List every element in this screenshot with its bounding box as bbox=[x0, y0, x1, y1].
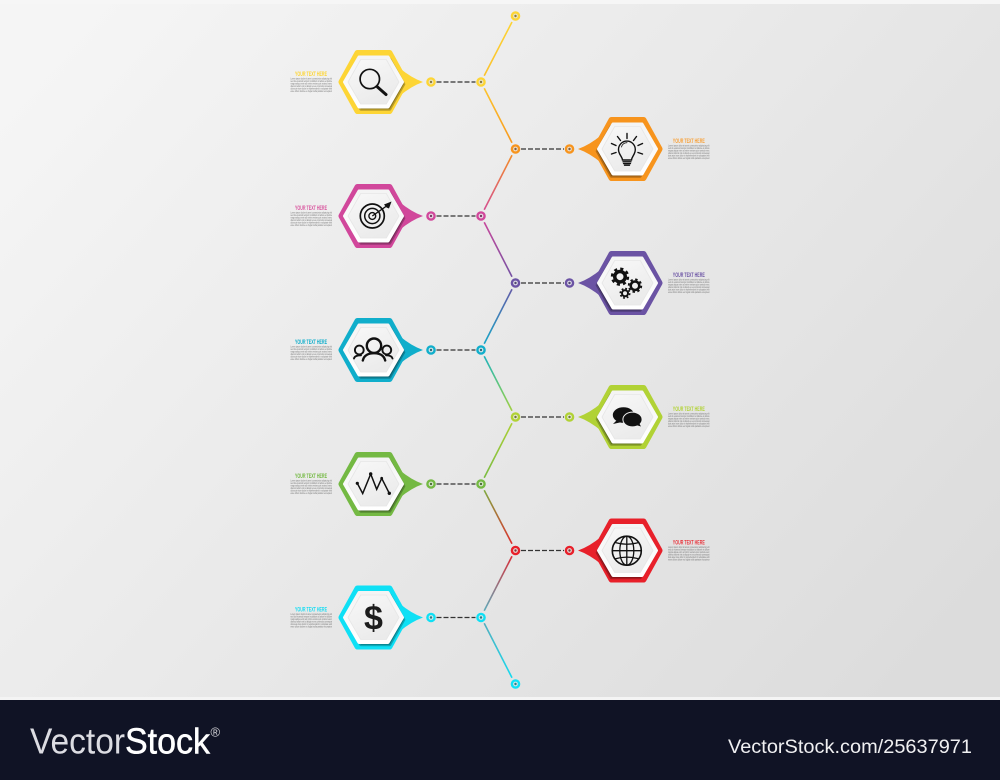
text block: globe: sed do eiusmod tempor incididunt ut labore et dolore bbox=[668, 548, 710, 552]
icon: three people bbox=[354, 338, 392, 360]
text block: dollar: magna aliqua enim ad minim veniam quis nostrud exerc bbox=[290, 618, 333, 621]
icon: speech bubbles bbox=[613, 407, 642, 427]
text block: target: ullamco laboris nisi ut aliquip ex ea commodo consequat bbox=[290, 219, 332, 222]
text block: gears: magna aliqua enim ad minim veniam quis nostrud exerc bbox=[668, 284, 710, 286]
text block: team: ullamco laboris nisi ut aliquip ex ea commodo consequat bbox=[290, 353, 332, 356]
text block: target bbox=[290, 205, 333, 227]
text block: idea: sed do eiusmod tempor incididunt ut labore et dolore bbox=[668, 147, 710, 150]
text block: dollar: Lorem ipsum dolor sit amet consectetur adipiscing elit bbox=[290, 613, 332, 616]
text block: search: sed do eiusmod tempor incididunt ut labore et dolore bbox=[290, 80, 332, 83]
text block: idea: ullamco laboris nisi ut aliquip ex ea commodo consequat bbox=[668, 152, 710, 155]
hexagon: target (pink) bbox=[342, 187, 423, 245]
footer image id: VectorStock.com/25637971 bbox=[728, 736, 972, 758]
connector dots bbox=[427, 12, 573, 688]
text block: dollar: sed do eiusmod tempor incididunt ut labore et dolore bbox=[290, 616, 332, 618]
text block: chat: sed do eiusmod tempor incididunt ut labore et dolore bbox=[668, 415, 710, 418]
text block: team: sed do eiusmod tempor incididunt ut labore et dolore bbox=[290, 348, 332, 351]
hexagon: globe (red) bbox=[578, 522, 660, 580]
text block: dollar: duis aute irure dolor in reprehenderit in voluptate velit bbox=[290, 623, 332, 626]
text block: chat: duis aute irure dolor in reprehenderit in voluptate velit bbox=[668, 422, 710, 426]
text block: search: ullamco laboris nisi ut aliquip ex ea commodo consequat bbox=[290, 85, 332, 88]
text block: dollar bbox=[290, 606, 333, 628]
text block: gears: sed do eiusmod tempor incididunt ut labore et dolore bbox=[668, 281, 710, 284]
text block: team: YOUR TEXT HERE bbox=[295, 339, 327, 346]
footer logo: Vector bbox=[30, 720, 125, 762]
text block: globe: ullamco laboris nisi ut aliquip ex ea commodo consequat bbox=[668, 554, 710, 556]
text block: chat: ullamco laboris nisi ut aliquip ex ea commodo consequat bbox=[668, 420, 710, 423]
text block: dollar: ullamco laboris nisi ut aliquip ex ea commodo consequat bbox=[290, 620, 332, 624]
text block: search: YOUR TEXT HERE bbox=[295, 71, 327, 78]
text block: search bbox=[290, 71, 333, 93]
text block: idea: esse cillum dolore eu fugiat nulla pariatur excepteur bbox=[668, 157, 710, 160]
text block: globe: duis aute irure dolor in reprehenderit in voluptate velit bbox=[668, 556, 710, 559]
text block: chart: sed do eiusmod tempor incididunt ut labore et dolore bbox=[290, 482, 332, 485]
icon: gears bbox=[612, 269, 641, 298]
hexagon: team (teal) bbox=[342, 321, 423, 379]
icon: magnifier bbox=[360, 69, 386, 94]
hexagon: idea (orange) bbox=[578, 120, 660, 178]
text block: chart bbox=[290, 473, 333, 495]
icon: globe bbox=[612, 536, 641, 565]
text block: gears: ullamco laboris nisi ut aliquip ex ea commodo consequat bbox=[668, 286, 710, 289]
text block: dollar: esse cillum dolore eu fugiat nulla pariatur excepteur bbox=[290, 626, 332, 628]
spine: zigzag connector lines bbox=[484, 22, 512, 678]
text block: chart: YOUR TEXT HERE bbox=[295, 473, 327, 480]
text block: idea: YOUR TEXT HERE bbox=[673, 138, 705, 145]
text block: search: Lorem ipsum dolor sit amet consectetur adipiscing elit bbox=[290, 78, 332, 80]
icon: light bulb bbox=[612, 134, 642, 165]
text block: gears: Lorem ipsum dolor sit amet consectetur adipiscing elit bbox=[668, 278, 710, 282]
footer band bbox=[0, 700, 1000, 780]
text block: chart: ullamco laboris nisi ut aliquip ex ea commodo consequat bbox=[290, 487, 332, 490]
text block: gears: YOUR TEXT HERE bbox=[673, 272, 705, 279]
text block: chat: YOUR TEXT HERE bbox=[673, 406, 705, 413]
text block: globe: magna aliqua enim ad minim veniam quis nostrud exerc bbox=[668, 551, 710, 554]
hexagon: chat (lime) bbox=[578, 388, 660, 446]
text block: target: Lorem ipsum dolor sit amet consectetur adipiscing elit bbox=[290, 212, 332, 214]
text block: chart: esse cillum dolore eu fugiat nulla pariatur excepteur bbox=[290, 492, 332, 495]
text block: search: duis aute irure dolor in reprehenderit in voluptate velit bbox=[290, 88, 332, 90]
text block: idea: duis aute irure dolor in reprehenderit in voluptate velit bbox=[668, 154, 710, 158]
footer logo: ® bbox=[210, 724, 220, 740]
text block: target: sed do eiusmod tempor incididunt ut labore et dolore bbox=[290, 214, 332, 217]
text block: team: magna aliqua enim ad minim veniam quis nostrud exerc bbox=[290, 350, 333, 354]
text block: globe bbox=[668, 540, 710, 562]
text block: idea: Lorem ipsum dolor sit amet consectetur adipiscing elit bbox=[668, 144, 710, 148]
footer logo bbox=[30, 720, 220, 762]
text block: globe: esse cillum dolore eu fugiat nulla pariatur excepteur bbox=[668, 558, 710, 562]
icon: line chart bbox=[356, 472, 391, 495]
icon: target with arrow bbox=[360, 202, 392, 228]
text block: team: esse cillum dolore eu fugiat nulla pariatur excepteur bbox=[290, 358, 332, 361]
hexagon: search (yellow) bbox=[342, 53, 423, 111]
text block: gears: duis aute irure dolor in reprehenderit in voluptate velit bbox=[668, 288, 710, 292]
text block: team: duis aute irure dolor in reprehenderit in voluptate velit bbox=[290, 356, 332, 358]
hexagon: dollar (cyan) bbox=[342, 588, 423, 646]
text block: chat: Lorem ipsum dolor sit amet consectetur adipiscing elit bbox=[668, 412, 710, 416]
text block: chart: duis aute irure dolor in reprehenderit in voluptate velit bbox=[290, 490, 332, 492]
text block: chat: esse cillum dolore eu fugiat nulla pariatur excepteur bbox=[668, 425, 710, 428]
icon: dollar sign: $ bbox=[364, 600, 383, 638]
text block: globe: Lorem ipsum dolor sit amet consectetur adipiscing elit bbox=[668, 546, 710, 549]
hexagon: gears (purple) bbox=[578, 254, 660, 312]
text block: target: YOUR TEXT HERE bbox=[295, 205, 327, 212]
text block: search: magna aliqua enim ad minim veniam quis nostrud exerc bbox=[290, 82, 333, 86]
text block: target: esse cillum dolore eu fugiat nulla pariatur excepteur bbox=[290, 224, 332, 227]
text block: search: esse cillum dolore eu fugiat nulla pariatur excepteur bbox=[290, 90, 332, 93]
dashed connectors bbox=[436, 82, 564, 618]
text block: chat: magna aliqua enim ad minim veniam quis nostrud exerc bbox=[668, 418, 710, 420]
text block: target: duis aute irure dolor in reprehenderit in voluptate velit bbox=[290, 222, 332, 224]
text block: team bbox=[290, 339, 333, 361]
text block: target: magna aliqua enim ad minim veniam quis nostrud exerc bbox=[290, 216, 333, 220]
text block: dollar: YOUR TEXT HERE bbox=[295, 606, 327, 614]
text block: idea bbox=[668, 138, 710, 160]
text block: idea: magna aliqua enim ad minim veniam quis nostrud exerc bbox=[668, 150, 710, 152]
text block: team: Lorem ipsum dolor sit amet consectetur adipiscing elit bbox=[290, 346, 332, 348]
text block: globe: YOUR TEXT HERE bbox=[673, 540, 705, 546]
text block: chart: Lorem ipsum dolor sit amet consectetur adipiscing elit bbox=[290, 480, 332, 482]
text block: gears: esse cillum dolore eu fugiat nulla pariatur excepteur bbox=[668, 291, 710, 294]
footer logo: Stock bbox=[125, 720, 211, 762]
text block: chart: magna aliqua enim ad minim veniam quis nostrud exerc bbox=[290, 484, 333, 488]
text block: chat bbox=[668, 406, 710, 428]
hexagon: chart (green) bbox=[342, 455, 423, 513]
text block: gears bbox=[668, 272, 710, 294]
